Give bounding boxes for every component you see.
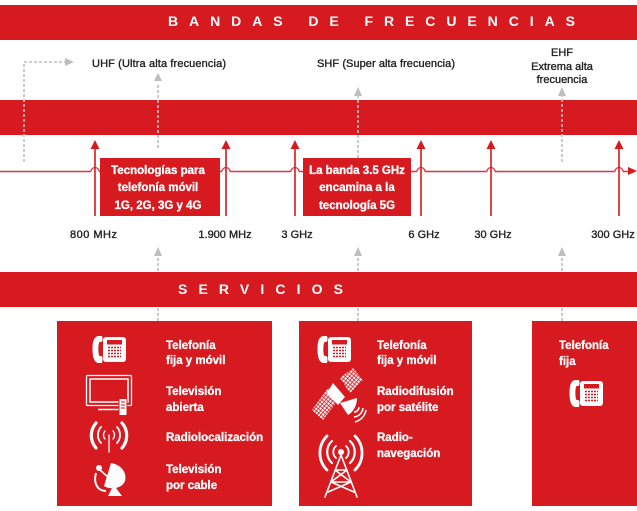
grey dashed connector: panel 1 xyxy=(154,247,162,321)
panel: SHF services xyxy=(299,321,472,506)
label: radiodifusión por satélite: Radiodifusión xyxy=(377,386,454,398)
frequency labels: 3 GHz xyxy=(281,229,313,241)
label: radiolocalización: Radiolocalización xyxy=(166,432,263,444)
label: telefonía fija: fija xyxy=(559,356,576,368)
header band: Bandas de frecuencias: BANDAS DE FRECUENCIAS xyxy=(168,13,575,29)
frequency labels: 6 GHz xyxy=(408,229,440,241)
grey dashed arrow: to EHF xyxy=(558,87,566,162)
grey dashed arrow: to UHF xyxy=(154,73,162,148)
callout: tecnologías móviles: telefonía móvil xyxy=(118,182,198,194)
frequency labels: 300 GHz xyxy=(591,229,635,241)
callout: tecnologías móviles xyxy=(100,158,220,216)
band label: SHF: SHF (Super alta frecuencia) xyxy=(317,58,455,70)
label: televisión abierta: abierta xyxy=(166,402,204,414)
label: telefonía fija xyxy=(559,340,609,368)
callout: banda 3.5 GHz xyxy=(303,158,411,216)
services band: SERVICIOS xyxy=(178,281,343,297)
grey dashed connector: panel 2 xyxy=(354,247,362,321)
callout: banda 3.5 GHz: encamina a la xyxy=(319,182,395,194)
label: telefonía fija y móvil xyxy=(377,340,436,367)
label: televisión abierta xyxy=(166,386,221,414)
band label: EHF: frecuencia xyxy=(537,74,588,86)
icon: radio tower xyxy=(320,436,362,497)
frequency labels: 30 GHz xyxy=(474,229,512,241)
middle red band xyxy=(0,100,637,135)
label: radiodifusión por satélite: por satélite xyxy=(377,402,438,414)
label: telefonía fija y móvil: fija y móvil xyxy=(166,355,225,367)
band label: EHF: Extrema alta xyxy=(531,61,594,73)
label: radionavegación: navegación xyxy=(377,448,440,460)
callout: banda 3.5 GHz: tecnología 5G xyxy=(319,200,395,212)
frequency labels: 800 MHz xyxy=(70,229,117,241)
label: telefonía fija y móvil: Telefonía xyxy=(377,340,427,352)
panel: EHF services xyxy=(532,321,637,506)
icon: telephone xyxy=(318,336,351,363)
frequency axis xyxy=(0,167,637,175)
icon: television xyxy=(86,376,132,416)
icon: telephone xyxy=(92,336,126,363)
tick arrows xyxy=(90,140,624,216)
services band xyxy=(0,272,637,307)
icon: radiolocation xyxy=(91,423,127,452)
callout: tecnologías móviles: 1G, 2G, 3G y 4G xyxy=(115,200,202,212)
label: radiodifusión por satélite xyxy=(377,386,454,414)
callout: banda 3.5 GHz: La banda 3.5 GHz xyxy=(309,165,405,177)
grey dashed arrow: to SHF xyxy=(354,87,362,158)
label: radionavegación: Radio- xyxy=(377,432,413,444)
icon: satellite dish xyxy=(95,463,125,496)
band label: EHF xyxy=(531,47,594,86)
label: televisión por cable: Televisión xyxy=(166,464,221,476)
label: telefonía fija y móvil xyxy=(166,340,225,367)
band label: UHF: UHF (Ultra alta frecuencia) xyxy=(92,58,226,70)
header band: Bandas de frecuencias xyxy=(0,5,637,40)
icon: satellite xyxy=(312,368,366,422)
label: televisión abierta: Televisión xyxy=(166,386,221,398)
frequency labels xyxy=(70,229,635,241)
icon: telephone xyxy=(570,380,603,407)
label: televisión por cable xyxy=(166,464,221,492)
label: radionavegación xyxy=(377,432,440,460)
label: telefonía fija: Telefonía xyxy=(559,340,609,352)
grey dashed arrow: legend start to UHF xyxy=(24,58,74,162)
label: televisión por cable: por cable xyxy=(166,480,217,492)
frequency labels: 1.900 MHz xyxy=(198,229,252,241)
band label: EHF: EHF xyxy=(551,47,573,59)
grey dashed connector: panel 3 xyxy=(558,247,566,321)
label: telefonía fija y móvil: fija y móvil xyxy=(377,355,436,367)
callout: tecnologías móviles: Tecnologías para xyxy=(111,165,205,177)
panel: UHF services xyxy=(57,321,272,506)
label: telefonía fija y móvil: Telefonía xyxy=(166,340,216,352)
